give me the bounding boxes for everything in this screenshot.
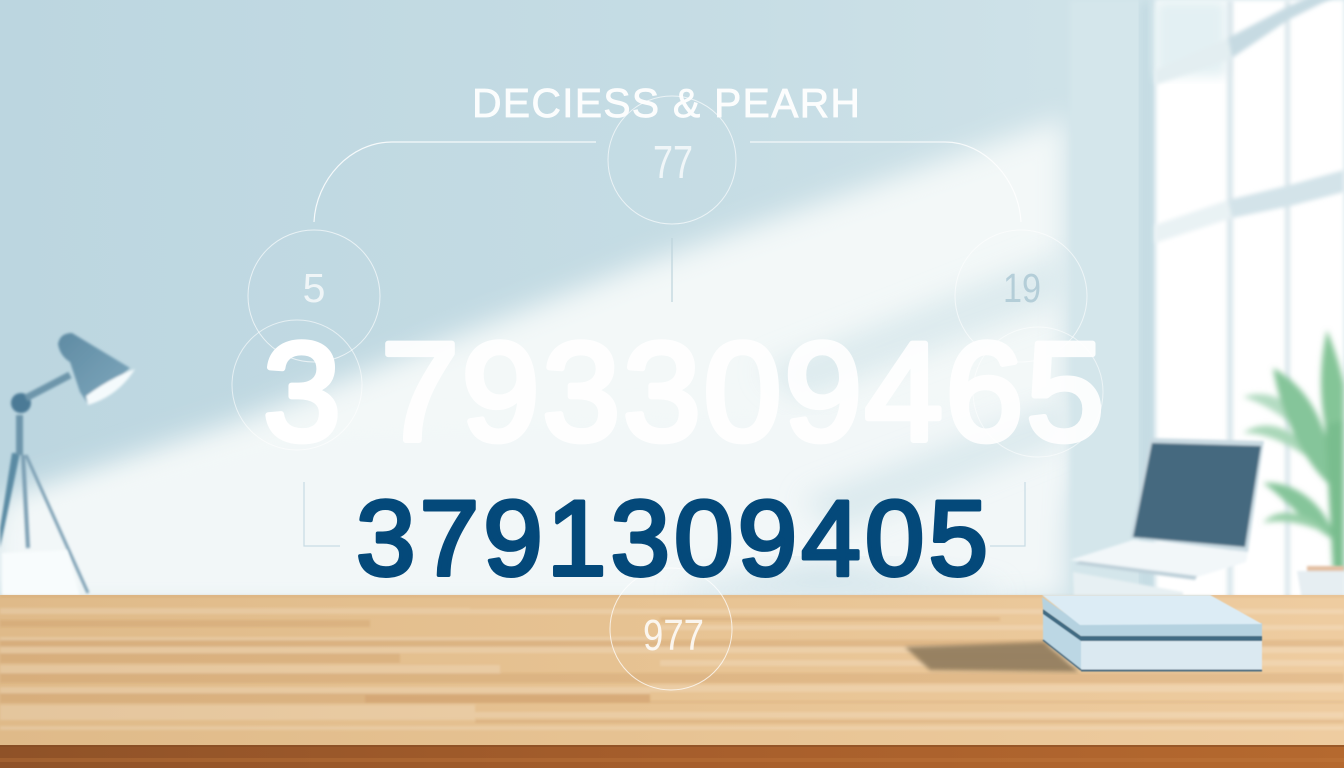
large white number: 793309465 bbox=[381, 313, 1104, 470]
circle node: 977 bbox=[610, 568, 732, 690]
white box under lamp bbox=[2, 550, 80, 596]
connector: left arc bbox=[314, 142, 596, 222]
icon: desk lamp bbox=[0, 333, 135, 593]
circle node: 77: 77 bbox=[653, 136, 693, 188]
circle node: 5: 5 bbox=[303, 265, 325, 311]
bracket right bbox=[990, 482, 1025, 546]
decorative circle right bbox=[973, 327, 1103, 457]
large white digit: 3 bbox=[263, 313, 341, 470]
icon: plant bbox=[1243, 330, 1344, 570]
circle node: 5 bbox=[248, 230, 380, 362]
background wall bbox=[0, 0, 1344, 600]
circle node: 977: 977 bbox=[643, 611, 704, 660]
icon: stack of books bbox=[1042, 595, 1262, 670]
main blue number: 3791309405 bbox=[356, 478, 988, 598]
decorative circle left bbox=[232, 320, 362, 450]
plant pot bbox=[1297, 566, 1344, 600]
title: DECIESS & PEARH bbox=[472, 80, 860, 126]
circle node: 19 bbox=[955, 230, 1087, 362]
connector: center line bbox=[671, 238, 673, 302]
window bbox=[1155, 0, 1344, 600]
circle node: 19: 19 bbox=[1003, 265, 1041, 311]
wooden table bbox=[0, 595, 1344, 768]
bracket left bbox=[304, 482, 340, 546]
icon: laptop on books bbox=[1070, 438, 1264, 598]
circle node: 77 bbox=[608, 96, 736, 224]
connector: right arc bbox=[750, 142, 1021, 222]
book shadow bbox=[905, 642, 1079, 672]
